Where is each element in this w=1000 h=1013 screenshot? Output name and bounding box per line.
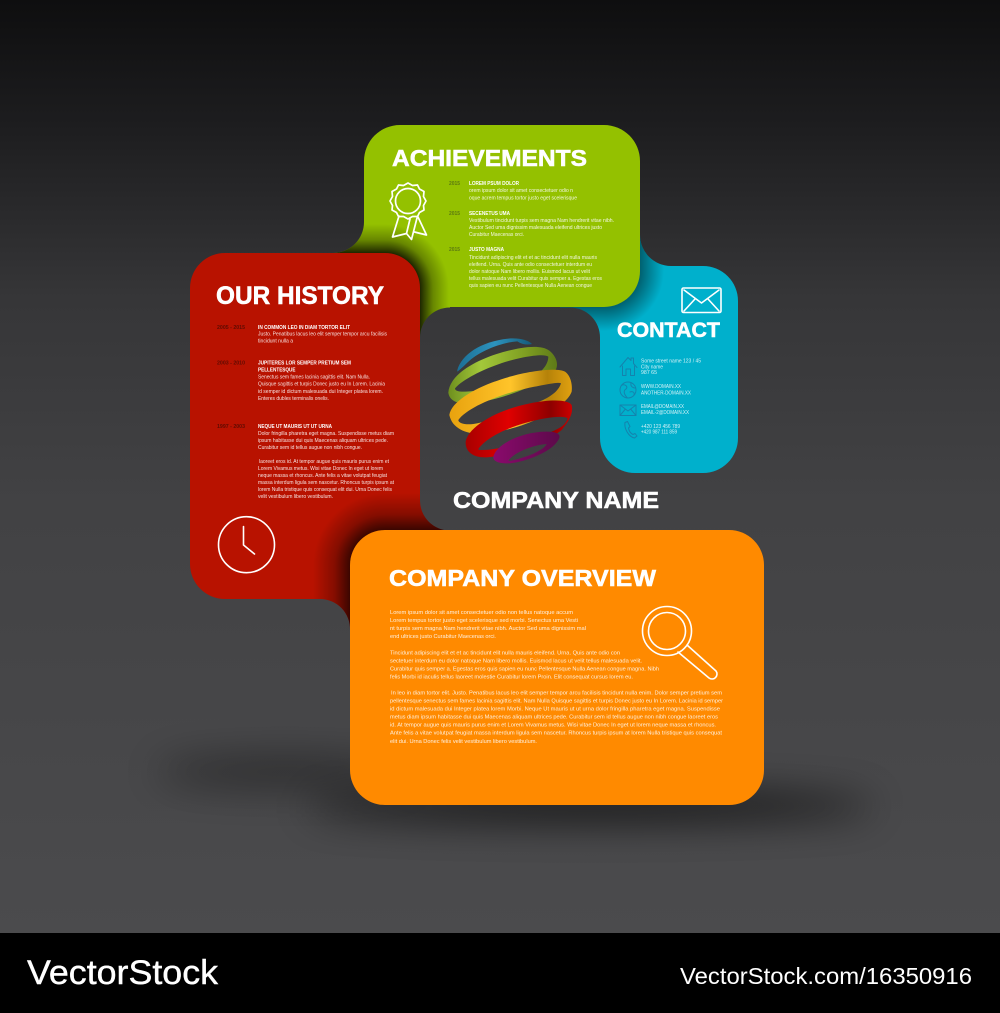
achievement entry 1: LOREM PSUM DOLOR (469, 181, 520, 187)
overview paragraph 1: nt turpis sem magna Nam hendrerit vitae nibh. Auctor Sed uma dignissim mal (390, 626, 586, 632)
history entry 1 (217, 325, 387, 344)
footer bar (0, 933, 1000, 1013)
email addresses: EMAIL@DOMAIN.XX (641, 404, 684, 410)
achievements heading: ACHIEVEMENTS (392, 145, 587, 171)
overview paragraph 1 (390, 610, 586, 640)
history entry 3: 1997 - 2003 (217, 424, 246, 430)
logo: striped sphere (448, 338, 572, 463)
achievement entry 1: oque acrem tempus tortor justo eget scelerisque (469, 196, 578, 202)
achievement entry 2: SECENETUS UMA (469, 211, 511, 217)
history entry 1: Justo. Penatibus lacus leo elit semper tempor arcu facilisis (258, 332, 387, 338)
overview paragraph 3 (390, 690, 723, 745)
achievement entry 2 (449, 211, 614, 238)
icon: globe (620, 382, 636, 398)
overview paragraph 2 (390, 650, 659, 680)
achievement entry 2: Auctor Sed uma dignissim malesuada eleifend ultrices justo (469, 225, 603, 231)
footer logo: VectorStock (27, 954, 219, 992)
history entry 3: NEQUE UT MAURIS UT UT URNA (258, 424, 333, 430)
phone numbers: +420 123 456 789 (641, 424, 680, 430)
overview heading: COMPANY OVERVIEW (389, 565, 656, 591)
achievement entry 3: 2015 (449, 247, 461, 253)
address: City name (641, 364, 663, 370)
overview paragraph 3: In leo in diam tortor elit. Justo. Penatibus lacus leo elit semper tempor arcu facilisis tincidunt nulla enim. Dolor semper pretium sem (391, 690, 722, 696)
overview paragraph 3: pellentesque senectus sem fames lacinia sagittis elit. Nam Nulla Quisque sagittis et turpis Donec justo eu In Lorem. Lacinia id semper (390, 698, 723, 704)
history entry 3: ipsum habitasse dui quis Maecenas aliquam ultrices pede. (258, 438, 388, 444)
phone numbers: +420 987 111 859 (641, 430, 677, 436)
company name: COMPANY NAME (453, 487, 659, 513)
history entry 2: 2003 - 2010 (217, 360, 246, 366)
history entry 3: massa interdum ligula sem nascetur. Rhoncus turpis ipsum at (258, 480, 394, 486)
achievement entry 1: 2015 (449, 181, 461, 187)
footer image id: VectorStock.com/16350916 (680, 963, 972, 989)
overview paragraph 3: elit dui. Urna Donec felis velit vestibulum libero vestibulum. (390, 739, 537, 745)
overview paragraph 1: Lorem tempus tortor justo eget scelerisque sed morbi. Senectus uma Vesti (390, 618, 578, 624)
achievement entry 2: Vestibulum tincidunt turpis sem magna Nam hendrerit vitae nibh. (469, 218, 614, 224)
icon: magnifier (642, 606, 717, 679)
overview paragraph 1: Lorem ipsum dolor sit amet consectetuer odio non tellus natoque accum (390, 610, 573, 616)
history entry 2: Quisque sagittis et turpis Donec justo eu In Lorem. Lacinia (258, 382, 386, 388)
email addresses: EMAIL-2@DOMAIN.XX (641, 410, 689, 416)
icon: award ribbon (390, 183, 426, 240)
achievement entry 1 (449, 181, 578, 202)
ground shadow (155, 758, 875, 820)
panel: our history (190, 253, 470, 640)
achievement entry 1: orem ipsum dolor sit amet consectetuer odio n (469, 188, 573, 194)
achievement entry 3: tellus malesuada velit Curabitur quis semper a. Egestas eros (469, 276, 602, 282)
icon: phone (625, 422, 637, 438)
history entry 2 (217, 360, 386, 402)
overview paragraph 2: sectetuer interdum eu dolor natoque Nam libero mollis. Euismod lacus ut velit tellus malesuada velit. (390, 658, 642, 664)
icon: envelope (682, 288, 721, 312)
history entry 1: IN COMMON LEO IN DIAM TORTOR ELIT (258, 325, 350, 331)
history entry 2: Senectus sem fames lacinia sagittis elit. Nam Nulla. (258, 374, 370, 380)
history entry 3: laoreet eros id. At tempor augue quis mauris purus enim et (259, 459, 389, 465)
icon: mail (620, 405, 636, 416)
icon: house (620, 358, 637, 376)
phone numbers (641, 424, 680, 436)
achievement entry 2: Curabitur Maecenas orci. (469, 232, 524, 238)
our history heading: OUR HISTORY (216, 282, 384, 310)
overview paragraph 1: end ultrices justo Curabitur Maecenas orci. (390, 634, 496, 640)
history entry 3: Dolor fringilla pharetra eget magna. Suspendisse metus diam (258, 431, 394, 437)
email addresses (641, 404, 689, 416)
overview paragraph 2: Curabitur quis semper a. Egestas eros quis sapien eu nunc Pellentesque Nulla Aenean congue magna. Nibh (390, 666, 659, 672)
history entry 2: PELLENTESQUE (258, 368, 296, 374)
history entry 3: neque massa et rhoncus. Ante felis a vitae volutpat feugiat (258, 473, 387, 479)
achievement entry 3: JUSTO MAGNA (469, 247, 505, 253)
achievement entry 3: eleifend. Urna. Quis ante odio consectetuer interdum eu (469, 262, 592, 268)
achievement entry 3: Tincidunt adipiscing elit et et ac tincidunt elit nulla mauris (469, 255, 597, 261)
history entry 3: Curabitur sem id tellus augue non nibh congue. (258, 445, 362, 451)
achievement entry 2: 2015 (449, 211, 461, 217)
panel: contact (560, 200, 738, 473)
history entry 1: 2005 - 2015 (217, 325, 246, 331)
web addresses: WWW.DOMAIN.XX (641, 384, 681, 390)
history entry 2: JUPITERES LOR SEMPER PRETIUM SEM (258, 360, 351, 366)
history entry 2: Enteres dubles terminalis onelis. (258, 396, 329, 402)
overview paragraph 2: Tincidunt adipiscing elit et et ac tincidunt elit nulla mauris eleifend. Urna. Quis ante odio con (390, 650, 620, 656)
overview paragraph 3: id dictum malesuada dui Integer platea lorem Morbi. Neque Ut mauris ut ut urna dolor fringilla pharetra eget magna. Suspendisse (390, 706, 721, 712)
history entry 3: velit vestibulum libero vestibulum. (258, 494, 333, 500)
achievement entry 3: dolor natoque Nam libero mollis. Euismod lacus ut velit (469, 269, 590, 275)
web addresses: ANOTHER-DOMAIN.XX (641, 390, 691, 396)
overview paragraph 2: felis Morbi id iaculis tellus laoreet molestie Curabitur lorem Proin. Elit consequat cursus lorem eu. (390, 674, 633, 680)
achievement entry 3 (449, 247, 602, 289)
icon: clock (218, 517, 274, 573)
overview paragraph 3: metus diam ipsum habitasse dui quis Maecenas aliquam ultrices pede. Curabitur sem id tellus augue non nibh congue laoreet eros (390, 714, 718, 720)
panel: achievements (333, 125, 640, 345)
history entry 3 (217, 424, 394, 500)
address: 987 65 (641, 370, 657, 376)
address: Some street name 123 / 45 (641, 358, 701, 364)
web addresses (641, 384, 691, 396)
overview paragraph 3: id. At tempor augue quis mauris purus enim et Lorem Vivamus metus. Wisi vitae Donec In eget ut lorem neque massa et rhoncus. (390, 722, 716, 728)
history entry 3: Lorem Vivamus metus. Wisi vitae Donec In eget ut lorem (258, 466, 383, 472)
address (641, 358, 701, 376)
history entry 1: tincidunt nulla a (258, 338, 294, 344)
achievement entry 3: quis sapien eu nunc Pellentesque Nulla Aenean congue (469, 283, 593, 289)
history entry 3: lorem Nulla tristique quis consequat elit dui. Urna Donec felis (258, 487, 392, 493)
panel: company overview (350, 530, 764, 805)
panel: company centre (420, 308, 659, 530)
overview paragraph 3: Ante felis a vitae volutpat feugiat massa interdum ligula sem nascetur. Rhoncus turpis ipsum at lorem Nulla tristique quis consequat (390, 730, 722, 736)
history entry 2: id semper id dictum malesuada dui Integer platea lorem. (258, 389, 383, 395)
contact heading: CONTACT (617, 319, 720, 342)
